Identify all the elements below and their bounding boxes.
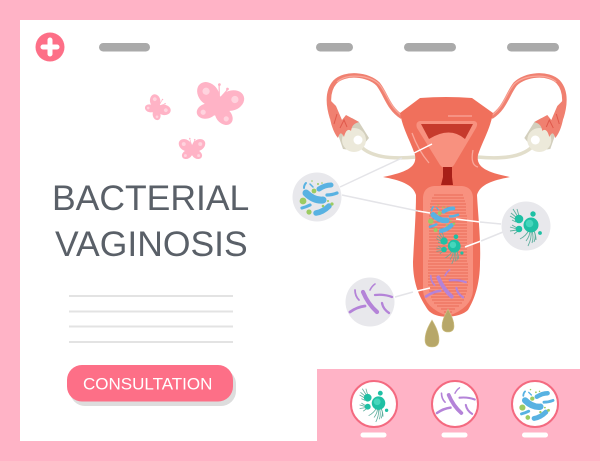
vaginal canal lining xyxy=(423,186,473,316)
uterine cavity xyxy=(416,121,477,168)
magnifier: teal bacteria xyxy=(502,202,550,250)
navigation placeholder pills xyxy=(99,43,559,52)
ribbed texture xyxy=(428,195,468,312)
consultation button xyxy=(67,365,236,406)
butterflies xyxy=(139,74,252,161)
fallopian tube and ovary right xyxy=(477,75,565,158)
bacteria in canal: purple xyxy=(426,270,466,297)
bottom icon: teal bacteria xyxy=(351,381,397,438)
discharge drop left xyxy=(425,320,439,347)
icon: medical plus logo xyxy=(36,32,64,62)
cervical canal xyxy=(441,167,453,185)
anatomy illustration xyxy=(328,75,565,347)
bacteria in canal: blue xyxy=(428,205,458,232)
consultation button: CONSULTATION xyxy=(83,374,212,394)
magnifier: purple bacteria xyxy=(346,278,394,326)
placeholder text lines xyxy=(69,296,233,342)
discharge drop right xyxy=(442,309,454,332)
connector lines xyxy=(340,144,503,297)
title: VAGINOSIS xyxy=(55,224,248,264)
bacteria in canal: teal xyxy=(436,233,464,264)
magnifier: blue bacteria xyxy=(292,172,342,222)
title xyxy=(52,178,249,264)
bottom icon: blue bacteria xyxy=(512,381,558,438)
bottom icon: purple bacteria xyxy=(432,381,478,438)
uterus and vagina outer body xyxy=(383,97,510,317)
title: BACTERIAL xyxy=(52,178,249,218)
fallopian tube and ovary left xyxy=(328,75,416,158)
body highlights xyxy=(412,116,478,167)
